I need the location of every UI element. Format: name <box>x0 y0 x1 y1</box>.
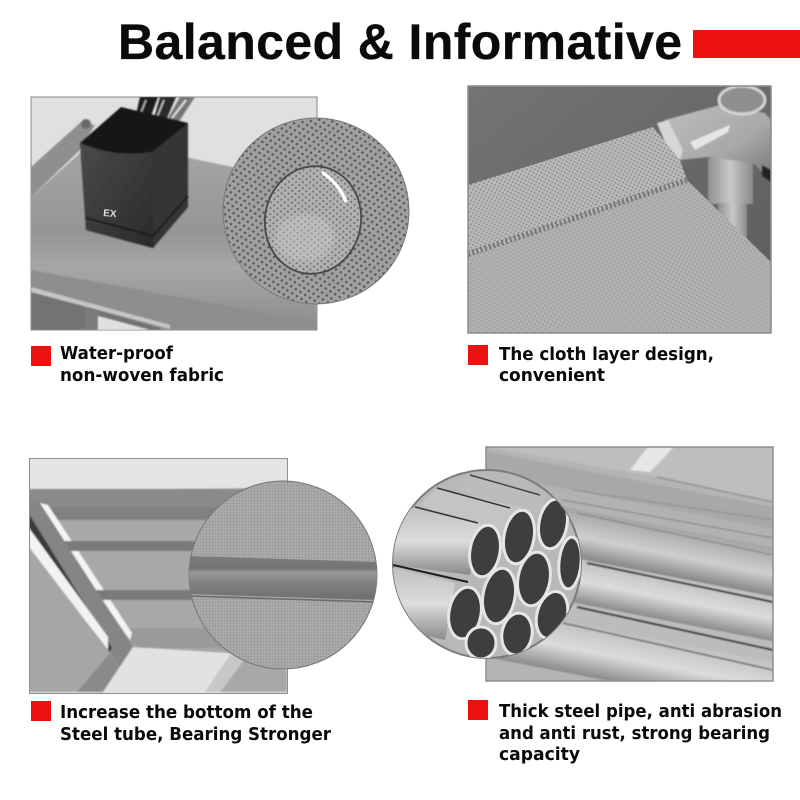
rods <box>64 540 195 552</box>
caption: steel tube: Increase the bottom of the <box>60 703 313 723</box>
panel: cloth layer photo <box>468 86 771 333</box>
red title bar <box>693 30 800 58</box>
red square marker <box>31 346 51 366</box>
magnifier: fabric droplet <box>223 118 409 304</box>
red square marker <box>468 345 488 365</box>
caption: steel pipe: and anti rust, strong bearing <box>499 724 770 744</box>
white strip <box>40 503 132 640</box>
caption: water-proof: non-woven fabric <box>60 366 224 386</box>
red square marker <box>468 700 488 720</box>
icon: pipe connector <box>657 86 771 238</box>
title: Balanced & Informative <box>118 14 682 70</box>
red square marker <box>31 701 51 721</box>
panel: water-proof fabric photo <box>31 97 409 330</box>
panel: bottom steel tube photo <box>29 458 377 694</box>
panel: thick steel pipes photo <box>392 446 774 682</box>
caption: steel pipe: capacity <box>499 745 581 765</box>
icon: pens <box>136 97 196 122</box>
fabric upper flap <box>468 127 687 257</box>
stitch line <box>468 180 687 254</box>
caption: steel tube: Steel tube, Bearing Stronger <box>60 725 331 745</box>
icon: cup logo: EX <box>103 208 117 220</box>
caption: steel pipe: Thick steel pipe, anti abrasion <box>499 702 782 722</box>
pipe openings <box>445 497 583 659</box>
icon: black pen holder <box>80 107 188 248</box>
fabric lower sheet <box>468 180 771 333</box>
caption: cloth layer: The cloth layer design, <box>499 345 714 365</box>
magnifier: pipe bundle <box>393 470 583 659</box>
frame <box>29 500 133 668</box>
caption: cloth layer: convenient <box>499 366 605 386</box>
magnifier: steel tube <box>189 481 377 669</box>
cloth <box>58 488 246 654</box>
caption: water-proof: Water-proof <box>60 344 173 364</box>
